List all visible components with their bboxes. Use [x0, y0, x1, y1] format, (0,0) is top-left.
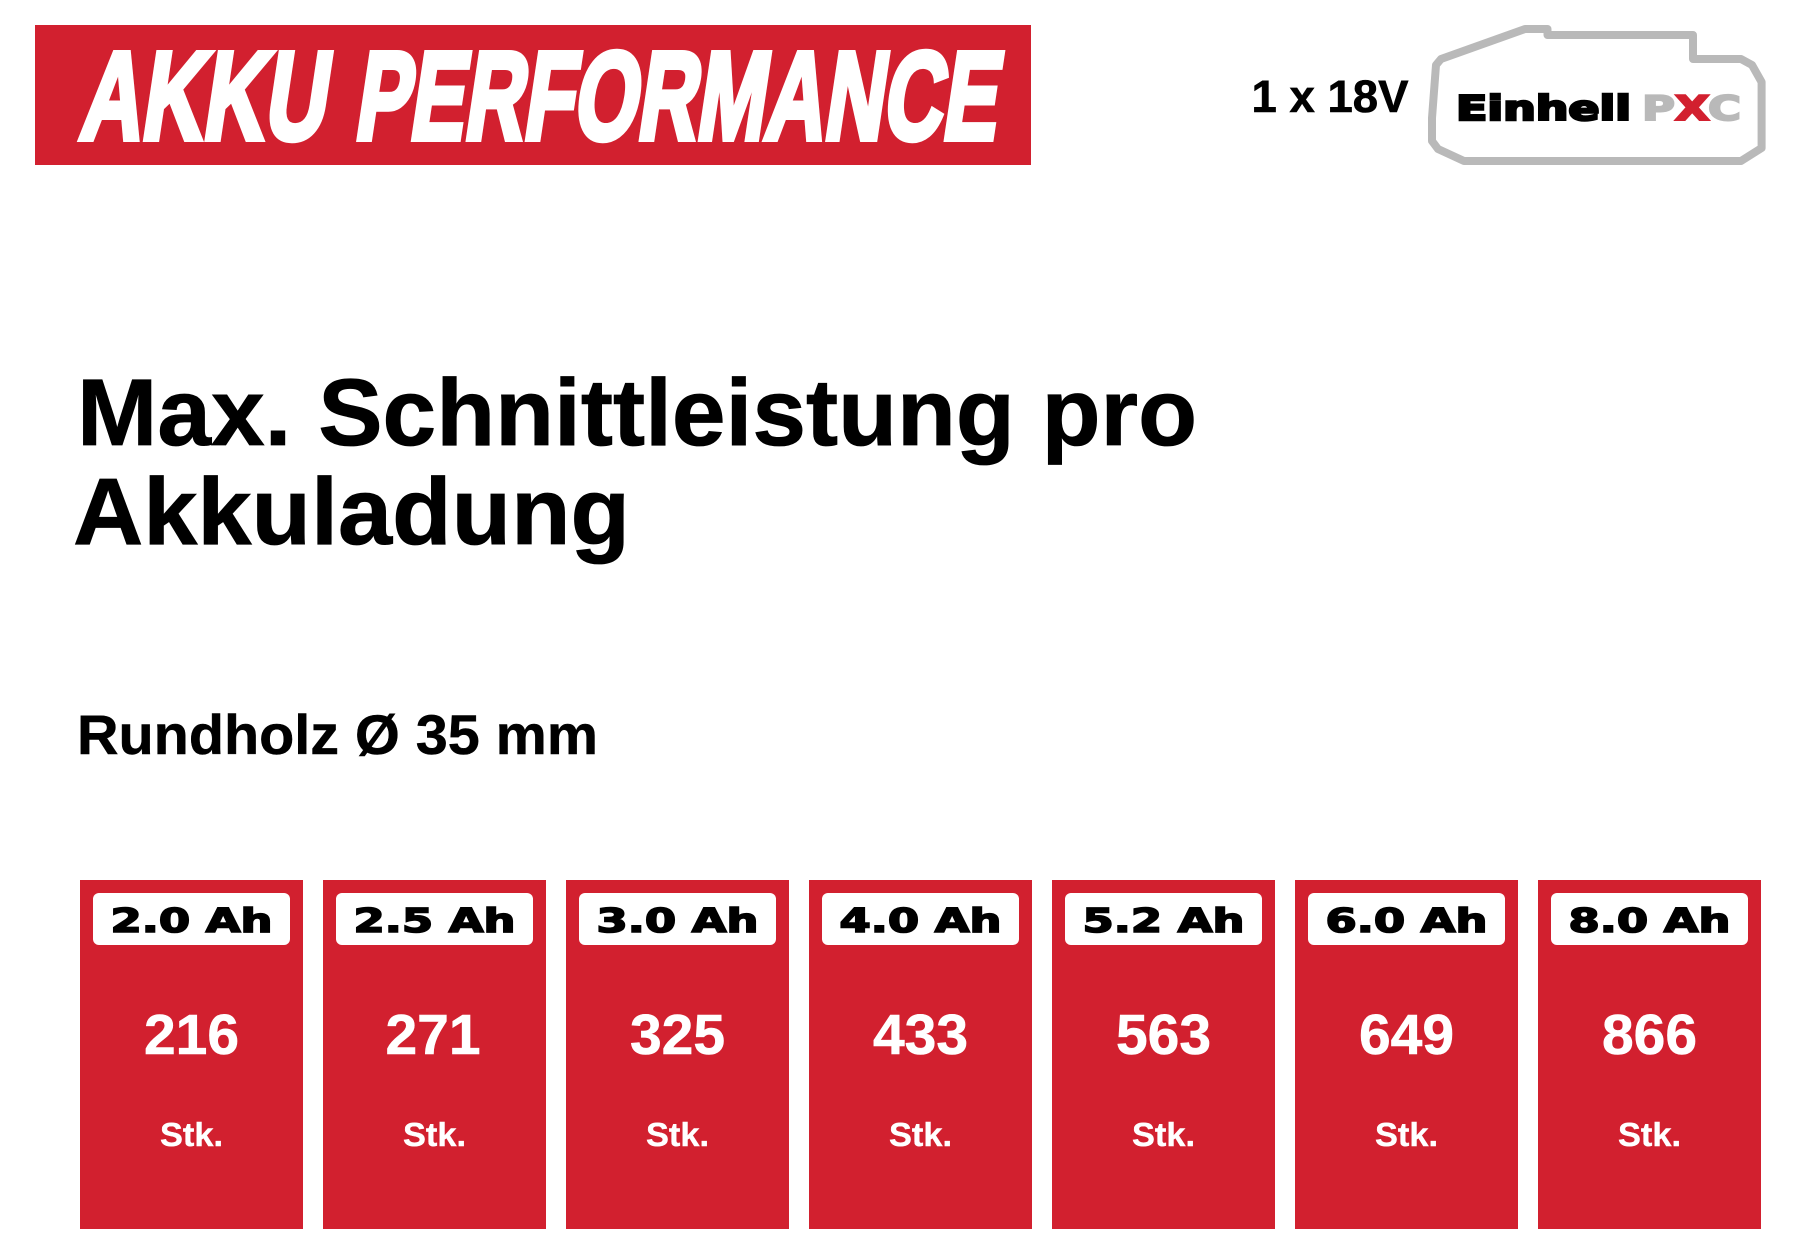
card: 8.0 Ah: Stk. — [1618, 1116, 1681, 1153]
card: 4.0 Ah: 433 — [873, 1003, 968, 1067]
card: 2.0 Ah: 216 — [144, 1003, 239, 1067]
card: 5.2 Ah: Stk. — [1132, 1116, 1195, 1153]
subheading: Rundholz Ø 35 mm — [77, 703, 598, 766]
card: 2.0 Ah — [80, 880, 303, 1229]
card: 3.0 Ah: Stk. — [646, 1116, 709, 1153]
card: 3.0 Ah: 325 — [630, 1003, 725, 1067]
title banner: PERFORMANCE — [349, 26, 1012, 166]
card: 6.0 Ah: Stk. — [1375, 1116, 1438, 1153]
card: 8.0 Ah: 8.0 Ah — [1568, 901, 1730, 940]
card: 6.0 Ah — [1295, 880, 1518, 1229]
card: 2.5 Ah: 2.5 Ah — [354, 901, 516, 940]
title banner — [35, 25, 1031, 166]
card: 8.0 Ah: 866 — [1602, 1003, 1697, 1067]
card: 2.0 Ah: 2.0 Ah — [110, 901, 272, 940]
card: 6.0 Ah: 6.0 Ah — [1326, 901, 1488, 940]
card: 2.0 Ah: Stk. — [160, 1116, 223, 1153]
heading — [73, 360, 1197, 565]
heading: Akkuladung — [73, 459, 630, 565]
card: 5.2 Ah: 5.2 Ah — [1082, 901, 1244, 940]
heading: Max. Schnittleistung pro — [77, 360, 1197, 466]
card: 5.2 Ah — [1052, 880, 1275, 1229]
title banner: AKKU — [74, 26, 341, 166]
icon: battery with Einhell PXC logo — [1432, 29, 1762, 161]
card: 5.2 Ah: 563 — [1116, 1003, 1211, 1067]
card: 4.0 Ah: 4.0 Ah — [840, 901, 1002, 940]
card: 8.0 Ah — [1538, 880, 1761, 1229]
card: 2.5 Ah — [323, 880, 546, 1229]
card: 4.0 Ah: Stk. — [889, 1116, 952, 1153]
battery voltage label: 1 x 18V — [1252, 71, 1408, 122]
card: 4.0 Ah — [809, 880, 1032, 1229]
card: 6.0 Ah: 649 — [1359, 1003, 1454, 1067]
icon: battery with Einhell PXC logo: PXC — [1642, 89, 1741, 129]
card: 2.5 Ah: 271 — [385, 1003, 481, 1067]
card: 2.5 Ah: Stk. — [403, 1116, 466, 1153]
card: 3.0 Ah: 3.0 Ah — [596, 901, 758, 940]
icon: battery with Einhell PXC logo: Einhell — [1456, 89, 1631, 129]
card: 3.0 Ah — [566, 880, 789, 1229]
